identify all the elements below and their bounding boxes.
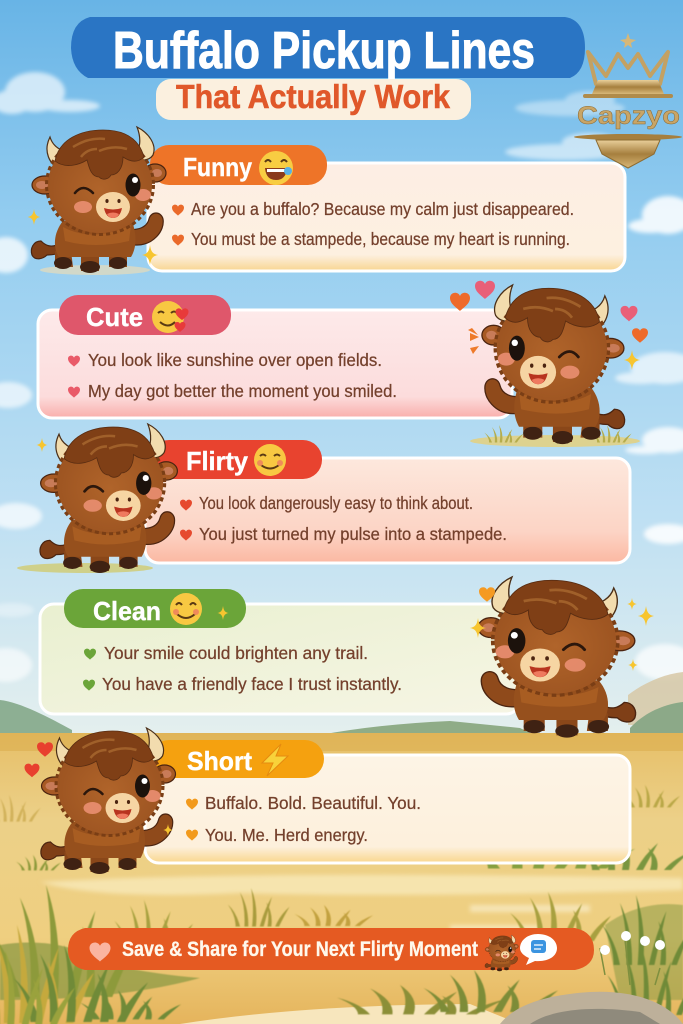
grass clumps bbox=[0, 785, 683, 1024]
buffalo: Funny bbox=[28, 127, 166, 275]
emoji: laughing bbox=[259, 151, 293, 185]
footer banner bbox=[68, 928, 594, 971]
pill: Clean: Clean bbox=[93, 596, 161, 626]
buffalo: Cute bbox=[450, 281, 648, 447]
text: Short lines bbox=[186, 793, 421, 845]
buffalo: Clean bbox=[470, 577, 654, 738]
pill: Short: Short bbox=[187, 746, 252, 776]
background: sky bbox=[0, 0, 683, 745]
text: Clean lines: Your smile could brighten any trail. bbox=[104, 643, 368, 663]
logo: Capzyo crown and shield bbox=[574, 33, 682, 168]
pill: Cute bbox=[59, 295, 231, 335]
title banner: Buffalo Pickup Lines bbox=[113, 22, 535, 80]
pill: Flirty bbox=[150, 440, 322, 479]
text: Funny lines: Are you a buffalo? Because my calm just disappeared. bbox=[191, 199, 574, 219]
icon: lightning bolt bbox=[262, 744, 288, 776]
pill: Short bbox=[150, 740, 324, 778]
text: Cute lines: You look like sunshine over open fields. bbox=[88, 350, 382, 370]
text: Short lines: Buffalo. Bold. Beautiful. You. bbox=[205, 793, 421, 813]
background: distant hills bbox=[0, 672, 683, 738]
pill: Funny bbox=[150, 145, 327, 185]
background: golden prairie bbox=[0, 733, 683, 1024]
panel: Funny bbox=[148, 145, 625, 271]
pill: Cute: Cute bbox=[86, 302, 143, 332]
text: Flirty lines: You look dangerously easy to think about. bbox=[199, 493, 473, 513]
pill: Funny: Funny bbox=[183, 152, 252, 182]
icon: chat bubble bbox=[520, 934, 557, 965]
icon: mini buffalo bbox=[485, 935, 518, 971]
panel: Clean bbox=[40, 589, 520, 714]
decoration: flowers and rock bbox=[500, 931, 683, 1024]
text: Cute lines bbox=[68, 350, 397, 401]
buffalo: Short bbox=[24, 728, 176, 874]
text: Cute lines: My day got better the moment you smiled. bbox=[88, 381, 397, 401]
text: Short lines: You. Me. Herd energy. bbox=[205, 825, 368, 845]
text: Clean lines: You have a friendly face I trust instantly. bbox=[102, 674, 402, 694]
emoji: smiling with hearts bbox=[152, 301, 188, 333]
logo: Capzyo crown and shield: Capzyo bbox=[577, 102, 680, 130]
subtitle plaque: That Actually Work bbox=[176, 78, 451, 115]
pill: Flirty: Flirty bbox=[186, 446, 249, 476]
panel: Short bbox=[145, 740, 630, 863]
panel: Flirty bbox=[145, 440, 630, 563]
footer banner: Save & Share for Your Next Flirty Moment bbox=[122, 938, 478, 961]
emoji: blushing smile bbox=[254, 444, 286, 476]
pill: Clean bbox=[64, 589, 246, 628]
text: Funny lines bbox=[172, 199, 574, 249]
text: Clean lines bbox=[83, 643, 402, 694]
panel: Cute bbox=[38, 295, 512, 418]
clouds bbox=[0, 72, 683, 682]
buffalo: Flirty bbox=[17, 424, 177, 573]
icon: heart bbox=[90, 942, 110, 962]
text: Flirty lines bbox=[180, 493, 507, 544]
emoji: smile bbox=[170, 593, 229, 625]
text: Flirty lines: You just turned my pulse into a stampede. bbox=[199, 524, 507, 544]
text: Funny lines: You must be a stampede, because my heart is running. bbox=[191, 229, 570, 249]
